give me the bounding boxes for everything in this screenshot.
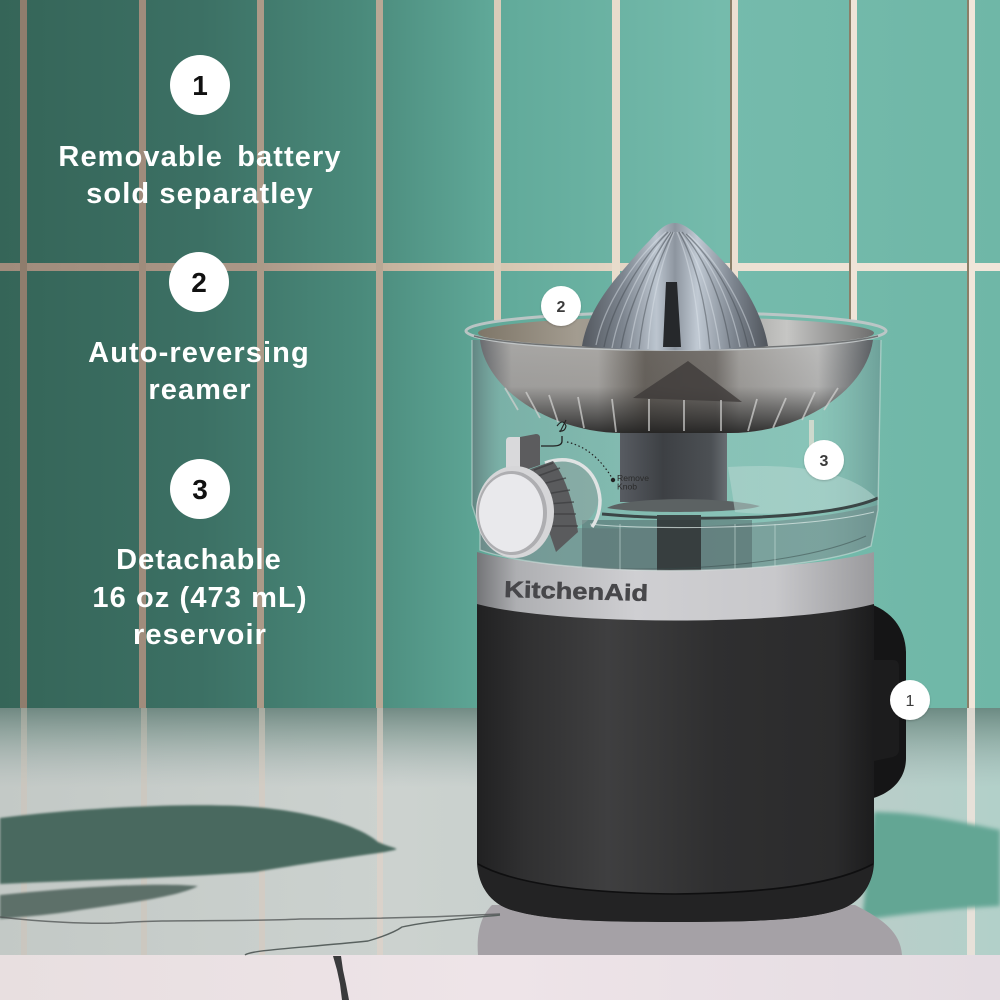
product reflection <box>478 905 902 955</box>
central shaft <box>620 430 727 502</box>
bowl rim <box>466 312 886 350</box>
remove-knob marking <box>541 420 649 492</box>
counter front edge <box>0 955 1000 1000</box>
clear reservoir <box>472 340 881 575</box>
feature 2 label: Auto-reversing <box>88 337 310 369</box>
base seam line <box>478 864 873 894</box>
feature 3 label: 16 oz (473 mL) <box>92 582 308 614</box>
background: teal tile wall <box>0 0 1000 710</box>
silver collar <box>477 552 874 620</box>
feature 3 label: reservoir <box>133 619 267 651</box>
callout marker 1 on battery: 1 <box>906 693 915 710</box>
feature 3: detachable reservoir <box>92 459 308 651</box>
battery pack <box>870 604 906 799</box>
refracted grout <box>809 420 814 447</box>
feature 1 label: sold separatley <box>86 178 314 210</box>
remove-knob marking: Remove <box>617 473 649 483</box>
feature 1 label: Removable battery <box>58 141 342 173</box>
base lower band shading <box>478 864 873 922</box>
lower tinted chamber <box>478 505 878 575</box>
drain slots <box>505 388 838 432</box>
background: marble counter top <box>0 708 1000 1000</box>
lower column <box>657 515 701 575</box>
bowl interior <box>478 317 874 349</box>
ribbed reamer cone <box>582 223 768 350</box>
callout marker 2 on reamer <box>541 286 581 326</box>
callout marker 3 on reservoir: 3 <box>820 453 829 470</box>
number badge 2 <box>169 252 229 312</box>
number badge 3 <box>170 459 230 519</box>
locking knob <box>476 434 600 558</box>
number badge 3: 3 <box>192 474 208 505</box>
callout marker 2 on reamer: 2 <box>557 299 566 316</box>
callout marker 1 on battery <box>890 680 930 720</box>
feature 1: removable battery <box>58 55 342 210</box>
cone reflection inside bowl <box>633 361 742 402</box>
marble veins <box>0 914 500 923</box>
feature 2: auto-reversing reamer <box>88 252 310 406</box>
feature 3 label: Detachable <box>116 544 282 576</box>
black motor base <box>477 600 874 922</box>
remove-knob marking: Knob <box>617 482 637 492</box>
number badge 2: 2 <box>191 267 207 298</box>
callout marker 3 on reservoir <box>804 440 844 480</box>
stainless steel bowl <box>466 312 886 433</box>
number badge 1 <box>170 55 230 115</box>
juicer product <box>466 223 906 922</box>
logo on silver collar: KitchenAid <box>504 576 649 606</box>
shadows and reflections on the counter <box>0 805 1000 1000</box>
number badge 1: 1 <box>192 70 208 101</box>
feature 2 label: reamer <box>148 374 252 406</box>
juice tray top <box>728 466 876 514</box>
